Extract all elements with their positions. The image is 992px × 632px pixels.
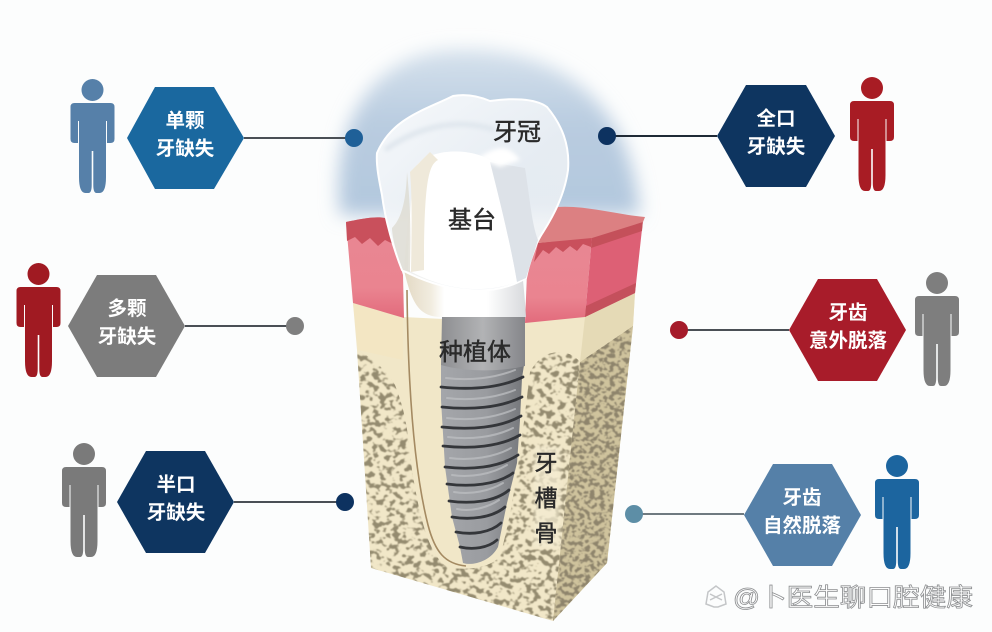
hexagon label: 牙齿 [828, 302, 868, 324]
right gum side [585, 220, 643, 317]
dental implant illustration [346, 95, 645, 630]
label: alveolar bone [534, 447, 560, 547]
person: gray [915, 272, 959, 386]
left gum [346, 217, 404, 318]
watermark text: @卜医生聊口腔健康 [733, 584, 973, 612]
label: abutment: 基台 [448, 207, 496, 234]
person: red [850, 77, 894, 191]
group: natural tooth loss [625, 455, 919, 569]
connector and dot [185, 317, 304, 335]
hexagon label: 意外脱落 [809, 329, 887, 352]
abutment [404, 152, 526, 317]
hexagon: multiple teeth [68, 275, 185, 377]
hexagon label: 牙齿 [782, 487, 822, 509]
implant collar [441, 317, 525, 370]
group: single tooth missing [70, 79, 363, 193]
group: accidental tooth loss [670, 272, 959, 386]
hexagon: half mouth [117, 451, 234, 553]
blue glow behind tooth [339, 50, 640, 215]
hexagon label: 牙缺失 [98, 326, 157, 348]
hexagon label: 牙缺失 [156, 138, 215, 160]
hexagon label: 牙缺失 [747, 136, 806, 158]
person: gray [62, 443, 106, 557]
connector and dot [234, 493, 354, 511]
root canal outline [407, 290, 466, 566]
hexagon: natural loss [744, 464, 861, 566]
connector and dot [244, 129, 363, 147]
group: full-mouth missing [598, 77, 894, 191]
hexagon label: 全口 [756, 108, 796, 130]
label: alveolar bone: 槽 [534, 485, 558, 511]
label: alveolar bone: 牙 [534, 450, 558, 476]
alveolar bone block [350, 293, 640, 630]
label: crown: 牙冠 [493, 119, 541, 146]
connector and dot [625, 505, 744, 523]
person: red [16, 263, 60, 377]
person: blue [875, 455, 919, 569]
label: alveolar bone: 骨 [534, 520, 558, 546]
hexagon label: 单颗 [165, 110, 205, 132]
hexagon: full mouth [717, 85, 835, 187]
right gum top [538, 207, 645, 243]
person: blue-gray [70, 79, 114, 193]
icon: watermark logo [706, 586, 726, 607]
connector and dot [598, 127, 717, 145]
label: implant: 种植体 [439, 339, 511, 366]
group: half-mouth missing [62, 443, 354, 557]
crown [377, 95, 568, 290]
hexagon label: 牙缺失 [147, 502, 206, 524]
hexagon label: 多颗 [107, 298, 147, 320]
right gum front [525, 237, 592, 323]
implant screw [441, 317, 525, 564]
hexagon: accidental loss [789, 279, 906, 381]
hexagon label: 自然脱落 [763, 514, 841, 537]
connector and dot [670, 321, 789, 339]
group: multiple teeth missing [16, 263, 304, 377]
watermark [706, 584, 973, 612]
hexagon: single tooth [127, 87, 244, 189]
hexagon label: 半口 [156, 474, 196, 496]
